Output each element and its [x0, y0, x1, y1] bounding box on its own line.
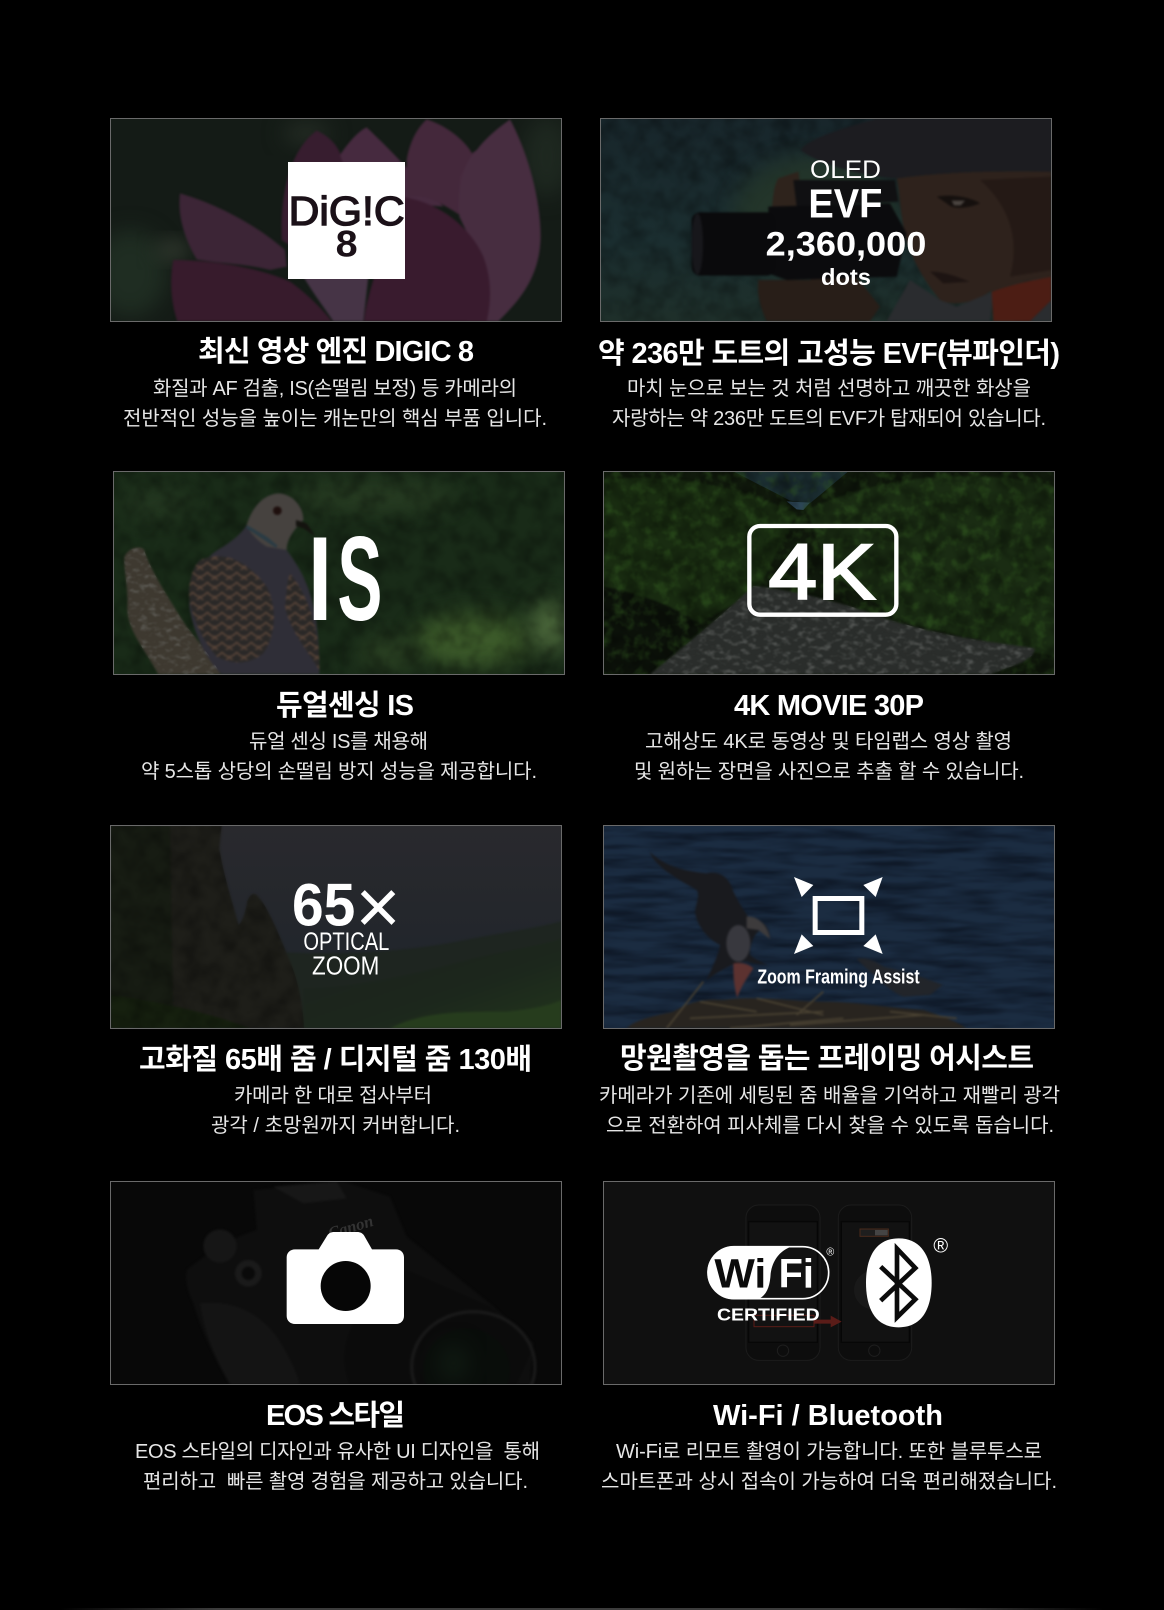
logo: Wi-Fi certified	[707, 1246, 834, 1325]
photo: photographer with camera	[600, 118, 1052, 321]
photo: forest river	[603, 471, 1055, 677]
logo: Wi-Fi certified: Wi	[714, 1250, 766, 1296]
description: 전반적인 성능을 높이는 캐논만의 핵심 부품 입니다.	[123, 407, 547, 430]
description: 마치 눈으로 보는 것 처럼 선명하고 깨끗한 화상을	[627, 377, 1031, 400]
photo: lotus flower	[93, 117, 570, 321]
description: 편리하고 빠른 촬영 경험을 제공하고 있습니다.	[143, 1470, 528, 1493]
panel: 4K movie	[603, 471, 1055, 783]
panel: zoom framing assist	[599, 825, 1060, 1137]
icon: framing assist	[757, 877, 920, 989]
overlay text: 65x optical zoom: ZOOM	[312, 951, 379, 981]
heading: 고화질 65배 줌 / 디지털 줌 130배	[139, 1043, 532, 1076]
icon: 4K badge: 4K	[768, 527, 876, 616]
description: 카메라 한 대로 접사부터	[234, 1084, 432, 1107]
photo: ospreys on nest	[603, 825, 1055, 1029]
panel: dual sensing IS	[113, 471, 570, 783]
description: 고해상도 4K로 동영상 및 타임랩스 영상 촬영	[645, 730, 1012, 753]
heading: EOS 스타일	[266, 1399, 405, 1432]
heading: 최신 영상 엔진 DIGIC 8	[198, 335, 474, 368]
overlay text: 65x optical zoom: ×	[355, 863, 401, 951]
panel: 65x optical zoom	[110, 825, 562, 1137]
photo: dark camera: Canon	[326, 1211, 376, 1243]
panel: Wi-Fi / Bluetooth	[601, 1181, 1057, 1493]
description: 및 원하는 장면을 사진으로 추출 할 수 있습니다.	[634, 760, 1024, 783]
overlay text: 65x optical zoom	[292, 863, 401, 981]
logo: Wi-Fi certified: Fi	[779, 1250, 814, 1296]
logo: Wi-Fi certified: ®	[826, 1246, 834, 1258]
description: 약 5스톱 상당의 손떨림 방지 성능을 제공합니다.	[141, 760, 537, 783]
panel: EOS style	[110, 1181, 562, 1493]
description: 광각 / 초망원까지 커버합니다.	[211, 1114, 460, 1137]
logo: DIGIC 8	[288, 162, 405, 279]
panel: DIGIC 8	[93, 117, 570, 430]
logo: Wi-Fi certified: CERTIFIED	[717, 1305, 820, 1325]
description: 으로 전환하여 피사체를 다시 찾을 수 있도록 돕습니다.	[606, 1114, 1054, 1137]
description: 자랑하는 약 236만 도트의 EVF가 탑재되어 있습니다.	[612, 407, 1046, 430]
overlay text: OLED EVF 2,360,000 dots: EVF	[808, 180, 882, 226]
description	[135, 1440, 540, 1493]
panel: EVF	[598, 118, 1060, 430]
description	[601, 1440, 1057, 1493]
label: Zoom Framing Assist: Zoom Framing Assist	[757, 967, 920, 989]
description	[634, 730, 1024, 783]
icon: white camera	[287, 1232, 404, 1324]
icon: 4K badge	[749, 526, 896, 616]
logo: DIGIC 8: 8	[336, 224, 358, 265]
overlay text: OLED EVF 2,360,000 dots: OLED	[810, 156, 881, 184]
photo: smartphones	[603, 1181, 1055, 1385]
description: 듀얼 센싱 IS를 채용해	[249, 730, 428, 753]
description	[123, 377, 547, 430]
description	[141, 730, 537, 783]
overlay text: IS	[308, 512, 382, 646]
heading: Wi-Fi / Bluetooth	[713, 1400, 943, 1432]
description: EOS 스타일의 디자인과 유사한 UI 디자인을 통해	[135, 1440, 540, 1463]
overlay text: IS: S	[337, 512, 382, 646]
overlay text: OLED EVF 2,360,000 dots: dots	[821, 264, 871, 290]
description: 스마트폰과 상시 접속이 가능하여 더욱 편리해졌습니다.	[601, 1470, 1057, 1493]
description	[211, 1084, 460, 1137]
logo: Bluetooth: ®	[933, 1236, 948, 1258]
logo: DIGIC 8: DiG!C	[289, 188, 405, 234]
description: 화질과 AF 검출, IS(손떨림 보정) 등 카메라의	[153, 377, 517, 400]
overlay text: 65x optical zoom: 65	[292, 871, 355, 939]
description: Wi-Fi로 리모트 촬영이 가능합니다. 또한 블루투스로	[616, 1440, 1042, 1463]
overlay text: OLED EVF 2,360,000 dots: 2,360,000	[766, 226, 926, 264]
photo: dove on stump	[113, 471, 570, 677]
heading: 약 236만 도트의 고성능 EVF(뷰파인더)	[598, 337, 1060, 370]
photo: rocky mountains	[110, 825, 562, 1029]
description	[599, 1084, 1060, 1137]
photo: dark camera	[184, 1182, 538, 1384]
logo: Bluetooth	[866, 1236, 948, 1327]
overlay text: OLED EVF 2,360,000 dots	[766, 156, 926, 290]
heading: 듀얼센싱 IS	[276, 689, 414, 722]
heading: 망원촬영을 돕는 프레이밍 어시스트	[620, 1042, 1034, 1075]
overlay text: 65x optical zoom: OPTICAL	[303, 928, 389, 956]
description	[612, 377, 1046, 430]
heading: 4K MOVIE 30P	[734, 690, 924, 722]
overlay text: IS: I	[308, 512, 332, 646]
description: 카메라가 기존에 세팅된 줌 배율을 기억하고 재빨리 광각	[599, 1084, 1060, 1107]
